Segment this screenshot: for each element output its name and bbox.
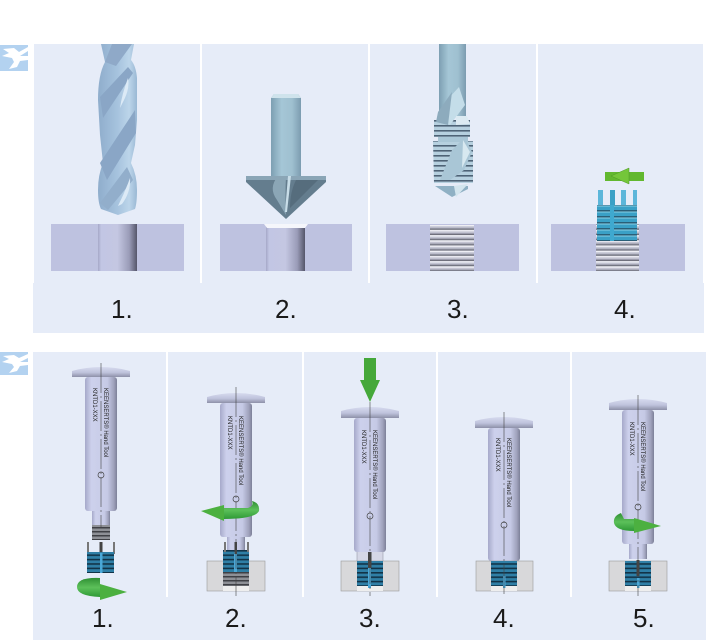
arrow: press down step 3: [360, 358, 380, 402]
panel: insert hand tool steps: [33, 352, 706, 640]
arrow: rotate right step 5: [614, 513, 661, 533]
hand tool step 3: KNTD1-XXX: [360, 430, 366, 464]
block and insert step 4: [476, 412, 533, 596]
countersink tool: [246, 94, 326, 219]
icon: wrench top: [0, 45, 28, 71]
block with insert and thread: [551, 224, 685, 271]
hand tool step 5: KNTD1-XXX: [628, 422, 634, 456]
hand tool step 2: KNTD1-XXX: [226, 416, 232, 450]
step numbers bottom: 1.: [92, 603, 114, 633]
arrow: green left: [605, 168, 644, 184]
arrow: rotate right step 1: [77, 578, 127, 600]
hand tool step 1: [72, 363, 130, 540]
step numbers top: 1.: [111, 294, 133, 324]
hand tool step 5: KEENSERTS® Hand Tool: [639, 422, 646, 491]
step numbers bottom: 2.: [225, 603, 247, 633]
step numbers top: 3.: [447, 294, 469, 324]
hand tool step 3: KEENSERTS® Hand Tool: [371, 430, 378, 499]
hand tool step 4: KEENSERTS® Hand Tool: [505, 438, 512, 507]
block with countersunk hole: [220, 224, 352, 271]
hand tool step 1: KNTD1-XXX: [91, 388, 97, 422]
hand tool step 1: KEENSERTS® Hand Tool: [102, 388, 109, 457]
step numbers top: [111, 294, 636, 324]
drill bit: [98, 44, 137, 215]
icon: wrench bottom: [0, 352, 28, 375]
step numbers top: 2.: [275, 294, 297, 324]
block and insert step 3: [341, 402, 399, 596]
step numbers top: 4.: [614, 294, 636, 324]
block and insert step 5: [609, 395, 667, 596]
hand tool step 2: [207, 393, 265, 556]
step numbers bottom: 4.: [493, 603, 515, 633]
step numbers bottom: [92, 603, 655, 633]
block and insert step 2: [207, 387, 265, 596]
block with drilled hole: [51, 224, 184, 271]
hand tool step 3: [341, 407, 399, 562]
tap tool: [433, 44, 473, 197]
thread insert: [597, 190, 637, 241]
step numbers bottom: 5.: [633, 603, 655, 633]
block with tapped thread: [386, 224, 519, 271]
panel: drilling and tapping steps: [33, 44, 704, 333]
arrow: rotate left step 2: [201, 501, 259, 521]
hand tool step 5: [609, 399, 667, 559]
hand tool step 4: [475, 417, 533, 561]
step numbers bottom: 3.: [359, 603, 381, 633]
hand tool step 2: KEENSERTS® Hand Tool: [237, 416, 244, 485]
hand tool step 4: KNTD1-XXX: [494, 438, 500, 472]
insert step 1: [87, 542, 115, 573]
